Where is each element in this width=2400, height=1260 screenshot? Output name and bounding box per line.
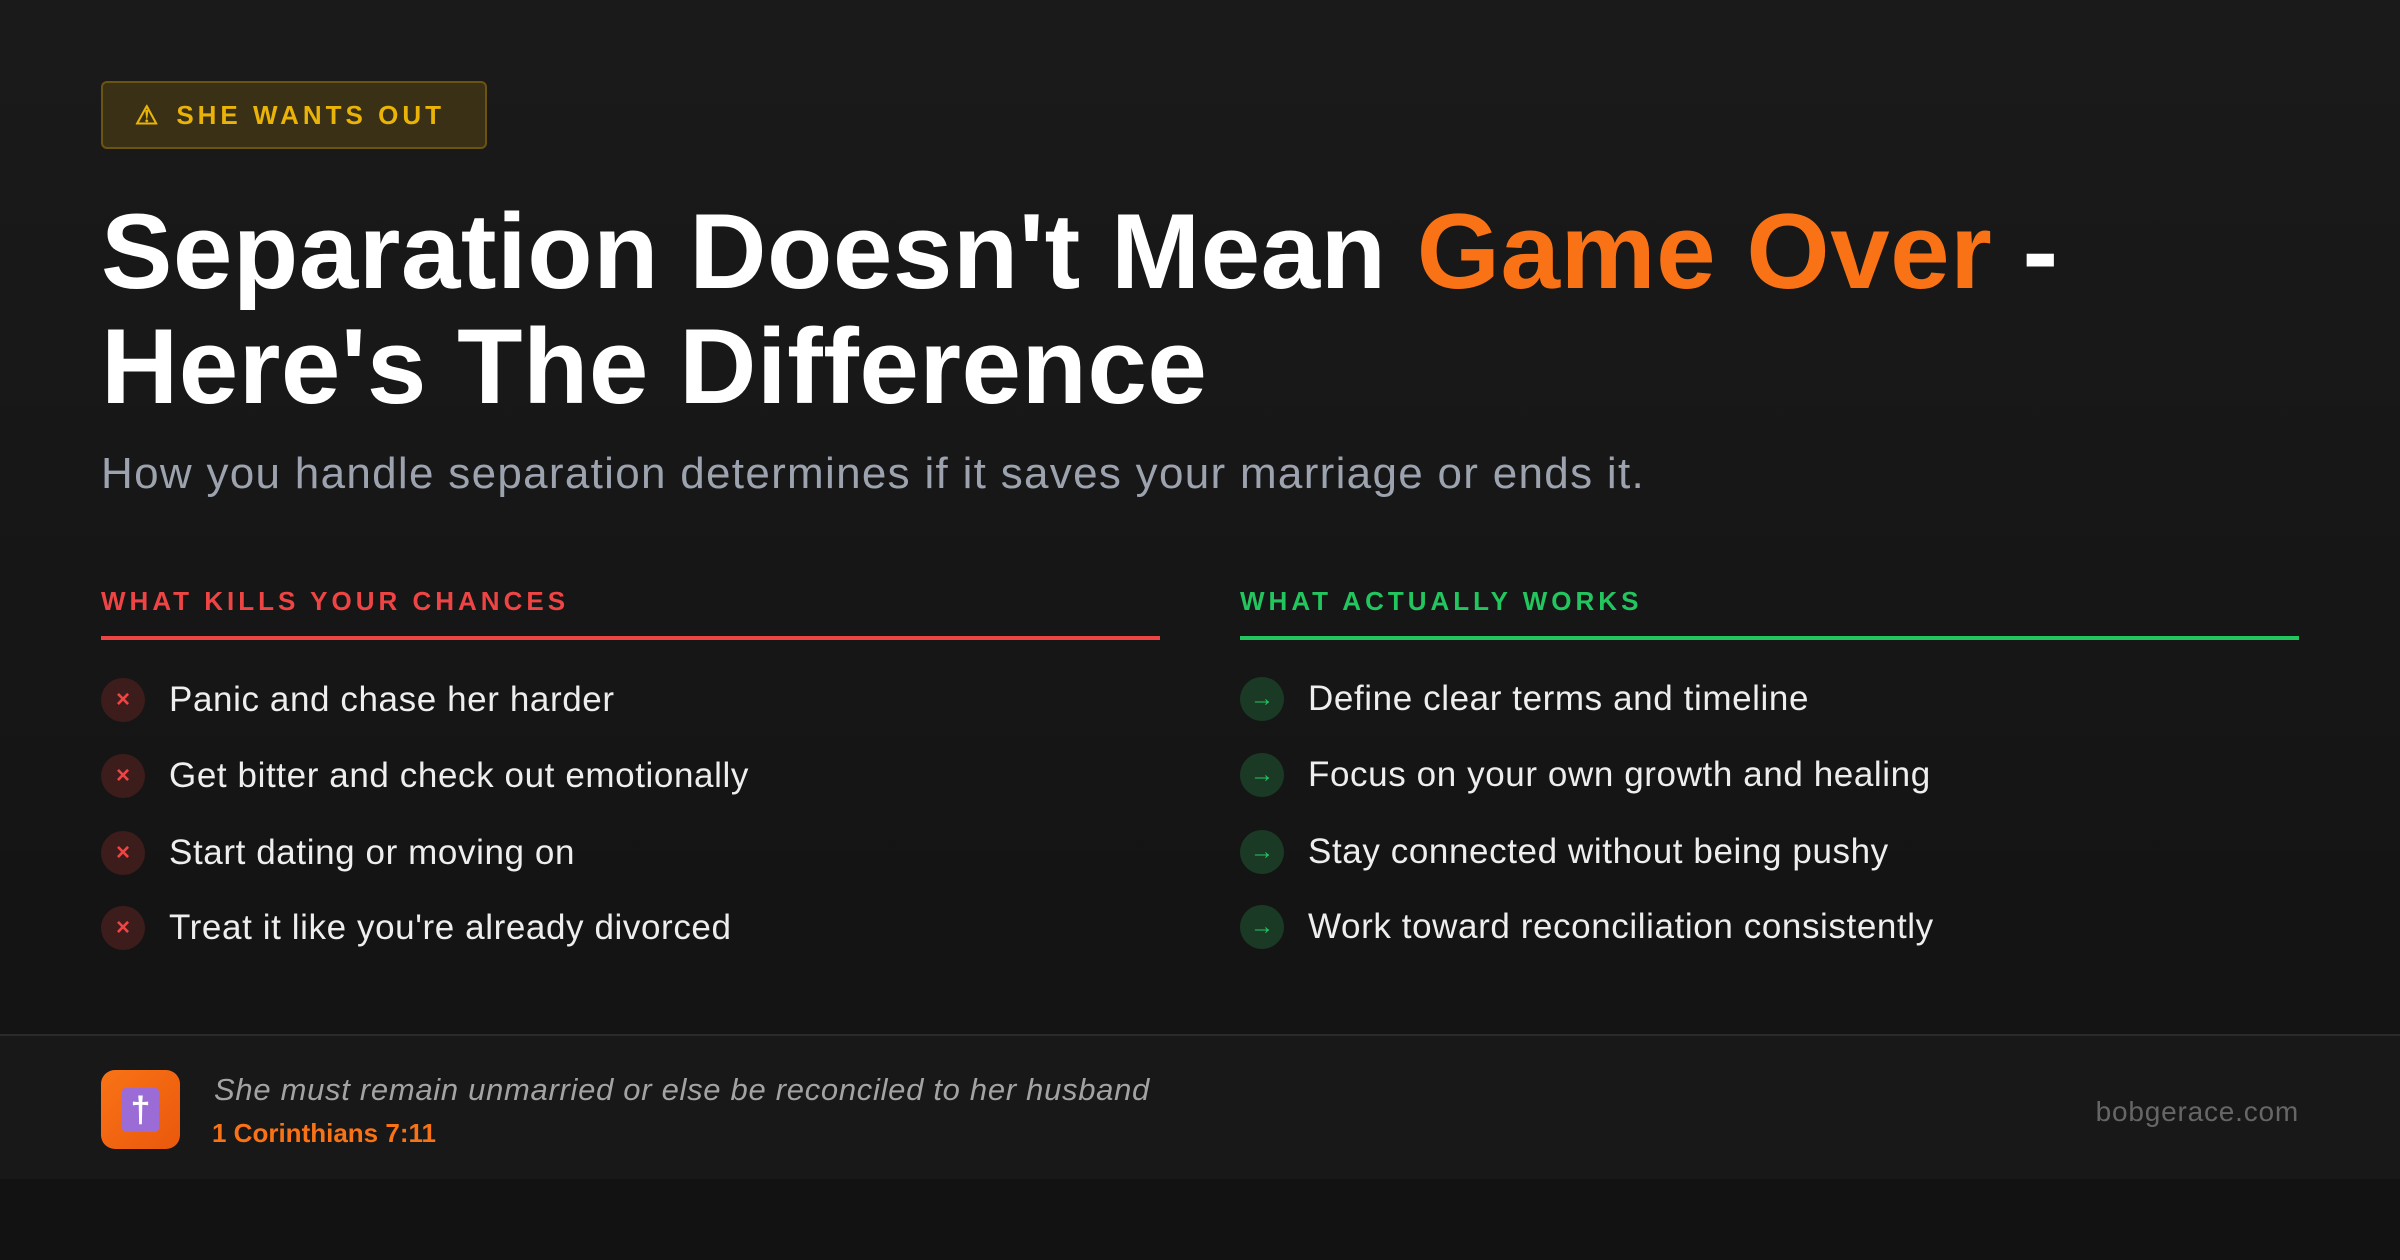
item 4: Treat it like you're already divorced — [169, 908, 732, 947]
badge — [101, 81, 487, 149]
item 2: Get bitter and check out emotionally — [169, 756, 749, 795]
item 2: × — [116, 762, 130, 789]
heading: works — [1240, 580, 2299, 640]
item 1: × — [116, 686, 130, 713]
item 4: Work toward reconciliation consistently — [1308, 907, 1934, 946]
heading: works: WHAT ACTUALLY WORKS — [1240, 586, 1642, 616]
icon: cross — [101, 1070, 180, 1149]
subtitle: How you handle separation determines if it saves your marriage or ends it. — [101, 449, 1645, 498]
badge: ⚠ — [135, 100, 162, 130]
item 1: Define clear terms and timeline — [1308, 679, 1809, 718]
item 4: → — [1250, 913, 1274, 940]
title: Separation Doesn't Mean Game Over - — [101, 191, 2059, 311]
item 3: Stay connected without being pushy — [1308, 832, 1889, 871]
footer — [0, 1034, 2400, 1179]
icon: cross: † — [130, 1088, 151, 1130]
title — [101, 191, 2059, 426]
panel: what kills your chances — [101, 586, 1160, 950]
panel: what actually works — [1240, 586, 2299, 949]
reference: 1 Corinthians 7:11 — [212, 1118, 436, 1148]
heading: kills: WHAT KILLS YOUR CHANCES — [101, 586, 569, 616]
item 1: Panic and chase her harder — [169, 680, 615, 719]
site: bobgerace.com — [2096, 1096, 2299, 1127]
item 2: → — [1250, 761, 1274, 788]
heading: kills — [101, 580, 1160, 640]
item 2: Focus on your own growth and healing — [1308, 755, 1931, 794]
item 3: → — [1250, 838, 1274, 865]
quote: She must remain unmarried or else be reconciled to her husband — [214, 1072, 1150, 1107]
item 3: Start dating or moving on — [169, 833, 575, 872]
item 3: × — [116, 839, 130, 866]
badge: SHE WANTS OUT — [176, 100, 445, 130]
item 4: × — [116, 914, 130, 941]
title: Here's The Difference — [101, 306, 1207, 426]
item 1: → — [1250, 685, 1274, 712]
